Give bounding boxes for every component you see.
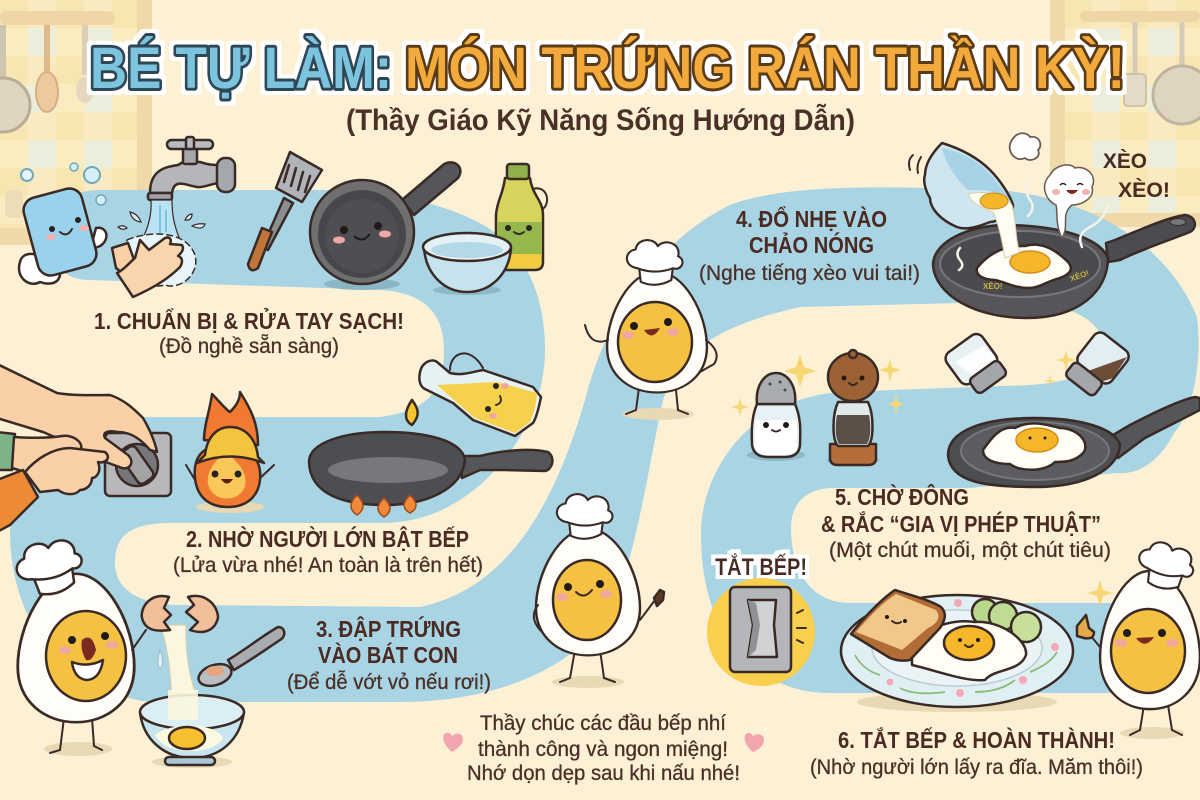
icon: faucet <box>148 137 235 200</box>
title: MÓN TRỨNG RÁN THẦN KỲ! <box>405 36 1125 101</box>
title <box>90 36 1125 101</box>
icon: glass bowl with egg <box>140 690 244 768</box>
icon: tilted salt shaker <box>942 331 1008 395</box>
icon: pan with pouring egg: XÈO! <box>1069 268 1090 283</box>
closing message: thành công và ngon miệng! <box>478 738 728 761</box>
stove-off label: TẮT BẾP! <box>715 553 807 581</box>
step 6 text: (Nhờ người lớn lấy ra đĩa. Măm thôi!) <box>810 756 1143 779</box>
step 5 text: 5. CHỜ ĐÔNG <box>835 483 969 510</box>
icon: oil jug pouring <box>406 353 541 436</box>
icon: water bowl <box>423 233 511 295</box>
step 4 text: CHẢO NÓNG <box>749 230 874 258</box>
icon: switch <box>707 578 815 686</box>
icon: fire mascot with helmet <box>186 392 274 513</box>
icon: pepper mill <box>827 350 879 466</box>
icon: oil bottle <box>496 164 547 270</box>
step 4 text: 4. ĐỔ NHẸ VÀO <box>736 205 887 232</box>
icon: pan with pouring egg <box>909 143 1195 318</box>
icon: plate with toast, egg and cucumber <box>841 590 1073 712</box>
step 6 text: 6. TẮT BẾP & HOÀN THÀNH! <box>838 726 1115 753</box>
step 5 text <box>821 483 1111 562</box>
kitchen window: top right <box>1050 0 1200 227</box>
subtitle: (Thầy Giáo Kỹ Năng Sống Hướng Dẫn) <box>346 103 855 137</box>
step 1 text: 1. CHUẨN BỊ & RỬA TAY SẠCH! <box>94 306 404 334</box>
icon: left heart <box>443 733 463 752</box>
step 3 text: 3. ĐẬP TRỨNG <box>316 615 461 642</box>
step 1 text <box>94 306 404 358</box>
icon: pan with sprinkled egg <box>948 397 1200 487</box>
egg mascot: center bottom <box>534 494 664 688</box>
icon: pan on burner <box>309 432 552 517</box>
icon: pan with pouring egg: XÈO! <box>983 282 1003 291</box>
title: BÉ TỰ LÀM: <box>90 36 392 101</box>
step 2 text: 2. NHỜ NGƯỜI LỚN BẬT BẾP <box>186 525 469 552</box>
sound effect text: XÈO! <box>1118 179 1170 202</box>
egg mascot: cracking egg <box>11 534 146 756</box>
sound effect text <box>1103 150 1170 202</box>
icon: right heart <box>744 733 764 752</box>
icon: salt shaker <box>747 373 805 461</box>
icon: tilted pepper shaker <box>1064 329 1132 397</box>
icon: cracked eggshell and stream <box>142 596 218 720</box>
egg mascot: thumbs up <box>1077 538 1200 739</box>
egg mascot: center top <box>585 240 717 420</box>
step 2 text <box>173 525 483 577</box>
step 6 text <box>810 726 1143 779</box>
icon: sponge <box>19 163 106 284</box>
winding blue path <box>10 187 1198 702</box>
step 1 text: (Đồ nghề sẵn sàng) <box>159 335 339 358</box>
icon: spoon with shell <box>196 627 284 690</box>
closing message: Nhớ dọn dẹp sau khi nấu nhé! <box>467 762 740 785</box>
step 4 text <box>699 205 920 285</box>
step 3 text: VÀO BÁT CON <box>318 641 458 668</box>
icon: adult hands turning stove knob <box>0 364 171 532</box>
step 2 text: (Lửa vừa nhé! An toàn là trên hết) <box>173 554 483 577</box>
icon: frying pan with face <box>310 162 460 290</box>
icon: washing hands <box>112 200 205 297</box>
closing message: Thầy chúc các đầu bếp nhí <box>480 712 726 735</box>
step 3 text <box>287 615 491 694</box>
step 3 text: (Để dễ vớt vỏ nếu rơi!) <box>287 671 491 694</box>
step 5 text: & RẮC “GIA VỊ PHÉP THUẬT” <box>821 510 1101 537</box>
closing message <box>467 712 740 785</box>
icon: spatula <box>248 152 322 270</box>
kitchen window: top left <box>0 0 152 245</box>
icon: steam clouds <box>958 133 1108 270</box>
icon: sparkles <box>731 350 1076 416</box>
sound effect text: XÈO <box>1103 150 1147 173</box>
step 4 text: (Nghe tiếng xèo vui tai!) <box>699 262 920 285</box>
step 5 text: (Một chút muối, một chút tiêu) <box>829 539 1111 562</box>
